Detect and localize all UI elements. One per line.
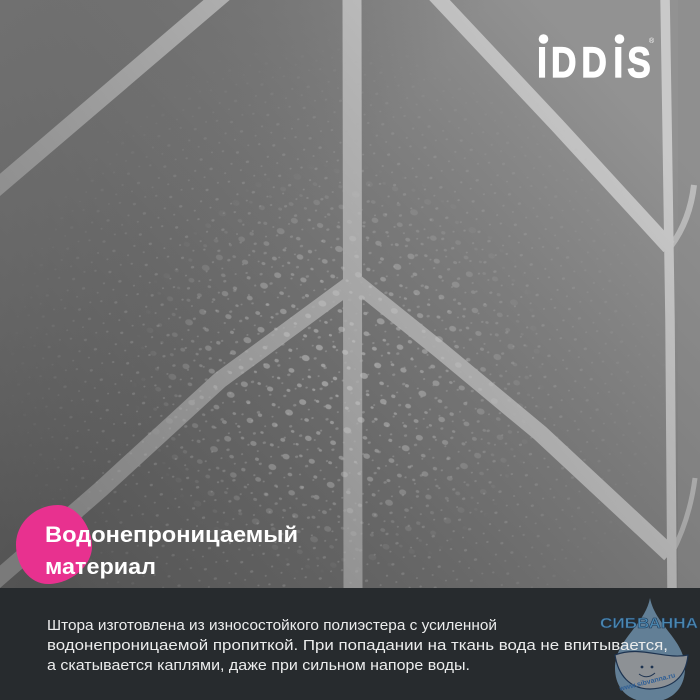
logo: iddis [537,34,655,87]
logo: iddis: D [581,39,607,87]
logo: iddis: D [551,39,576,87]
description text [47,618,668,674]
pink accent circle [16,505,92,584]
watermark face [639,666,655,677]
watermark bathtub [615,651,688,689]
logo: iddis: ® [649,37,655,45]
logo: iddis: I [613,39,623,87]
description text: а скатывается каплями, даже при сильном напоре воды. [47,658,470,674]
heading: материал [45,554,156,579]
water droplets [48,98,606,588]
watermark: sibvanna logo [600,598,698,700]
description text: Штора изготовлена из износостойкого полиэстера с усиленной [47,618,497,634]
watermark url: www.sibvanna.ru [618,672,676,693]
watermark name: СИБВАННА [600,615,698,632]
logo: iddis: S [627,39,651,87]
description text: водонепроницаемой пропиткой. При попадании на ткань вода не впитывается, [47,638,668,654]
watermark drop [615,598,685,700]
heading: Водонепроницаемый [45,522,298,547]
logo: iddis: I [537,39,547,87]
panel: description strip [0,588,700,700]
heading [45,522,298,579]
